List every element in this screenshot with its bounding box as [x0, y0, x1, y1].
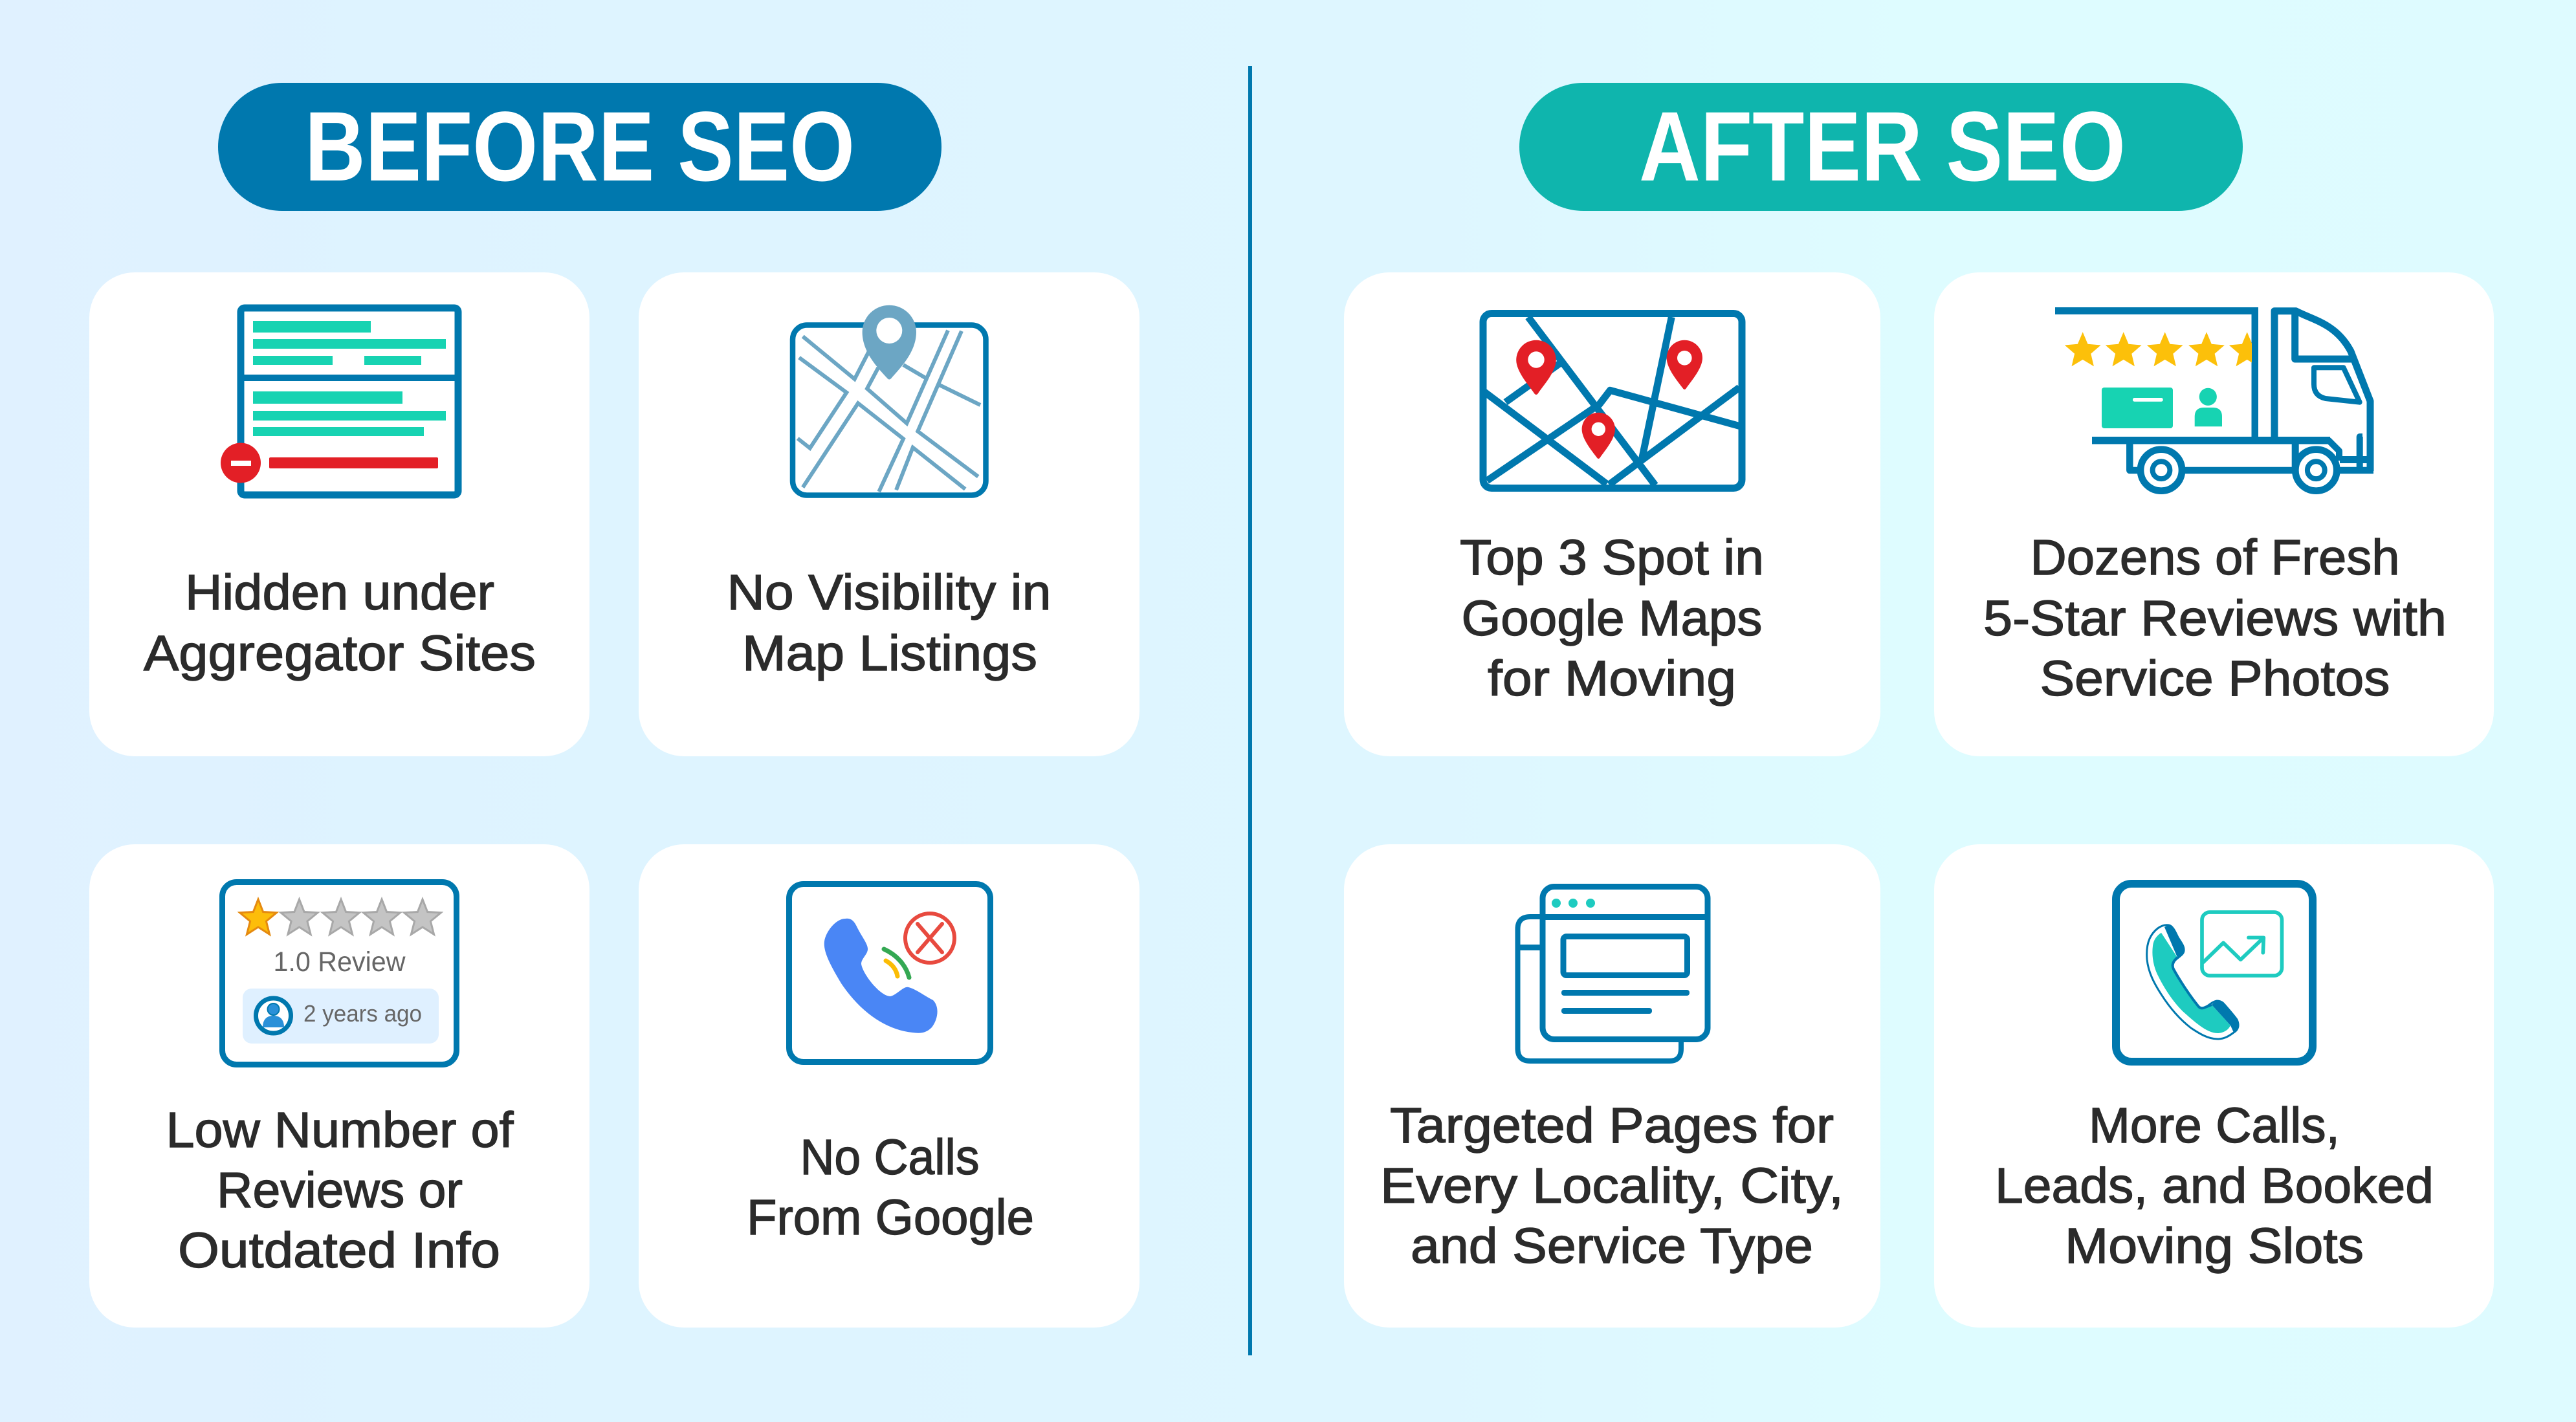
text: no calls from google: From Google [747, 1190, 1034, 1245]
text: more calls, leads, booked slots [1995, 1098, 2434, 1274]
center divider [1248, 66, 1252, 1355]
review age chip [243, 989, 439, 1044]
icon: phone with rising chart [2116, 884, 2313, 1062]
text: hidden under aggregator sites: Hidden under [185, 565, 494, 620]
five gold stars [2065, 332, 2265, 366]
phone handset [2147, 925, 2238, 1039]
text: dozens of fresh reviews: Dozens of Fresh [2031, 530, 2399, 585]
text: targeted pages: Targeted Pages for [1390, 1098, 1834, 1154]
text: hidden under aggregator sites [144, 565, 536, 681]
panel: no calls from google [639, 844, 1139, 1328]
text: targeted pages: and Service Type [1411, 1218, 1813, 1274]
text: no calls from google [747, 1130, 1034, 1245]
text: no calls from google: No Calls [800, 1130, 980, 1185]
icon: map with three red pins [1483, 313, 1742, 488]
text: low number of reviews or outdated info [166, 1102, 514, 1278]
text: no visibility in map listings: No Visibility in [727, 565, 1051, 620]
panel: hidden under aggregator sites [89, 272, 589, 756]
heading: after seo: AFTER SEO [1639, 91, 2126, 202]
rating stars [239, 899, 441, 934]
text: top 3 spot in google maps for moving [1460, 530, 1764, 706]
icon: map with pale pin [793, 305, 986, 496]
text: no visibility in map listings [727, 565, 1051, 681]
text: more calls, leads, booked slots: Leads, and Booked [1995, 1158, 2434, 1214]
heading: before seo: BEFORE SEO [305, 91, 855, 202]
rating label: 1.0 Review [273, 946, 406, 978]
rising chart [2202, 912, 2282, 976]
text: low number of reviews or outdated info: Reviews or [217, 1163, 463, 1218]
wheels [2141, 450, 2337, 491]
icon: one star review card [223, 882, 457, 1065]
text: more calls, leads, booked slots: Moving Slots [2065, 1218, 2364, 1274]
text: low number of reviews or outdated info: Outdated Info [178, 1223, 500, 1278]
text: low number of reviews or outdated info: Low Number of [166, 1102, 514, 1158]
text: dozens of fresh reviews: Service Photos [2040, 651, 2390, 706]
text: dozens of fresh reviews [1983, 530, 2447, 706]
service photo box [2102, 388, 2173, 428]
panel: top 3 spot in google maps [1344, 272, 1880, 756]
panel: targeted pages [1344, 844, 1880, 1328]
panel: more calls [1934, 844, 2494, 1328]
panel: low number of reviews [89, 844, 589, 1328]
text: no visibility in map listings: Map Listings [742, 626, 1037, 681]
text: top 3 spot in google maps for moving: for Moving [1488, 651, 1736, 706]
panel: fresh five star reviews [1934, 272, 2494, 756]
text: hidden under aggregator sites: Aggregator Sites [144, 626, 536, 681]
icon: phone with red cross [789, 884, 990, 1062]
text: more calls, leads, booked slots: More Calls, [2089, 1098, 2340, 1154]
person figure [2195, 388, 2222, 426]
text: dozens of fresh reviews: 5-Star Reviews with [1983, 591, 2447, 646]
heading: after seo [1519, 83, 2243, 211]
review age chip: 2 years ago [303, 1000, 422, 1027]
text: targeted pages: Every Locality, City, [1380, 1158, 1844, 1214]
panel: no visibility in map listings [639, 272, 1139, 756]
icon: search results page with demoted listing [221, 308, 461, 495]
text: top 3 spot in google maps for moving: Top 3 Spot in [1460, 530, 1764, 585]
icon: stacked browser windows [1517, 886, 1710, 1061]
icon: moving truck with stars [2055, 307, 2373, 491]
text: targeted pages [1380, 1098, 1844, 1274]
text: top 3 spot in google maps for moving: Google Maps [1461, 591, 1763, 646]
